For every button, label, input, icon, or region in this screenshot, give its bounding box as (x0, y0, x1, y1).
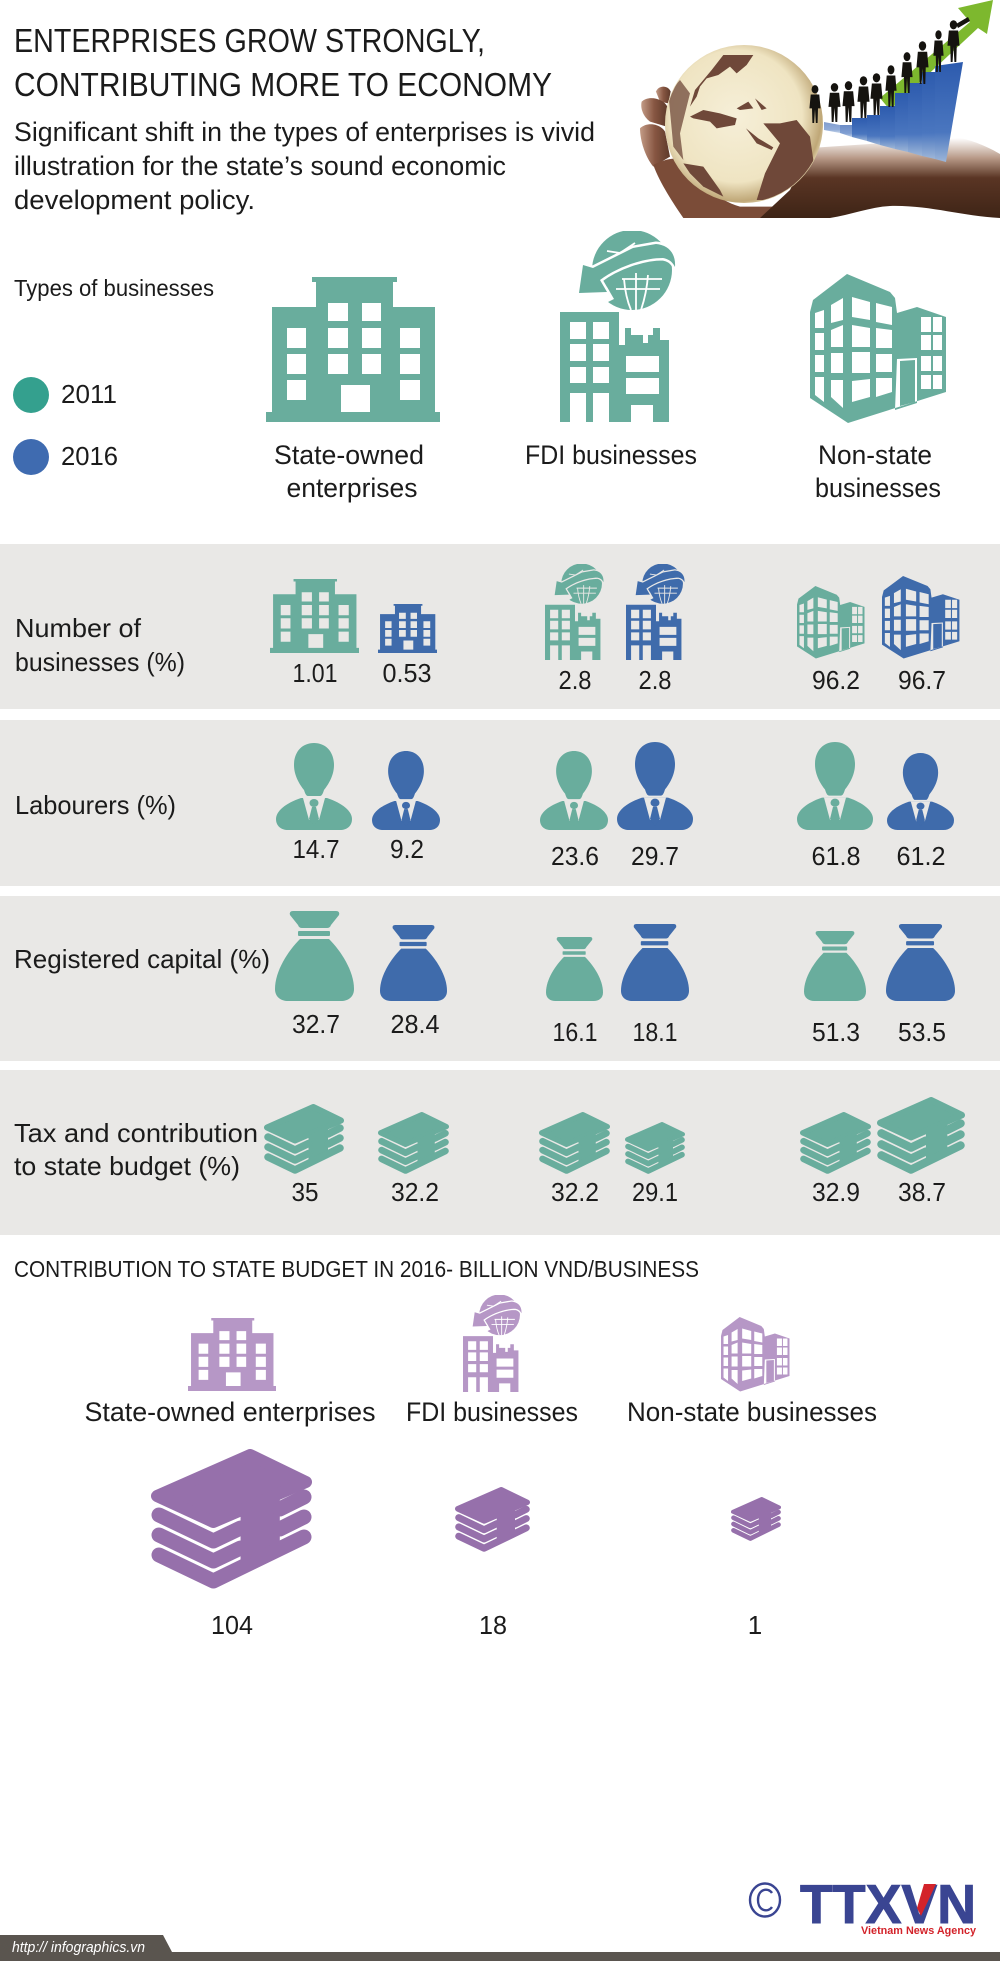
FDI 2016 (627, 1124, 683, 1207)
non-state 2011: 51.3 (812, 1017, 860, 1047)
non-state 2016: 96.7 (898, 665, 946, 695)
title: ENTERPRISES GROW STRONGLY, (14, 22, 485, 59)
agency name: Vietnam News Agency (861, 1925, 977, 1937)
row label: labourers: Labourers (%) (15, 790, 176, 820)
state-owned 2016: 0.53 (382, 658, 432, 688)
icon: green growth arrow (880, 0, 993, 110)
legend: 2016 (13, 439, 118, 475)
state-owned 2016 (378, 604, 437, 688)
non-state 2011 (797, 586, 865, 695)
FDI 2011 (546, 937, 603, 1047)
FDI 2011: 23.6 (551, 841, 599, 871)
state-owned 2011: 32.7 (292, 1009, 340, 1039)
type column: non-state businesses: businesses (815, 473, 941, 503)
FDI 2011: 2.8 (558, 665, 592, 695)
type column: state-owned enterprises: State-owned (274, 440, 424, 470)
FDI 2016: 2.8 (638, 665, 672, 695)
non-state 2016 (882, 576, 959, 695)
contribution column: non-state businesses (627, 1317, 877, 1640)
FDI 2016 (626, 563, 685, 695)
FDI 2016: 29.1 (632, 1177, 678, 1207)
state-owned 2016: 32.2 (391, 1177, 439, 1207)
state-owned 2011: 1.01 (292, 658, 338, 688)
state-owned 2011 (267, 1107, 341, 1207)
contribution column: non-state businesses: 1 (748, 1610, 762, 1640)
panel: registered capital (0, 896, 1000, 1061)
contribution column: FDI businesses (406, 1294, 578, 1640)
non-state 2016: 61.2 (896, 841, 946, 871)
icon: arm (760, 138, 1000, 218)
contribution column: FDI businesses: FDI businesses (406, 1397, 578, 1427)
state-owned 2011: 35 (292, 1177, 318, 1207)
type column: state-owned enterprises: enterprises (286, 473, 418, 503)
non-state 2011 (797, 742, 873, 871)
type column: FDI businesses: FDI businesses (525, 440, 697, 470)
FDI 2011 (542, 1115, 607, 1207)
state-owned 2016: 28.4 (390, 1009, 440, 1039)
icon: red V accent (917, 1884, 936, 1916)
subtitle text: development policy. (14, 185, 255, 215)
legend: 2011 (13, 377, 117, 413)
row label: number of businesses: businesses (%) (15, 647, 185, 677)
row label: number of businesses (15, 613, 185, 677)
non-state 2011: 96.2 (812, 665, 860, 695)
contribution column: state-owned enterprises: State-owned enterprises (84, 1397, 376, 1427)
non-state 2016 (887, 753, 954, 871)
FDI 2016 (617, 742, 693, 871)
non-state 2011 (804, 931, 866, 1047)
contribution column: non-state businesses: Non-state businesses (627, 1397, 877, 1427)
FDI 2011 (545, 563, 604, 695)
contribution column: state-owned enterprises: 104 (211, 1610, 253, 1640)
subtitle text (14, 117, 595, 215)
FDI 2011: 32.2 (551, 1177, 599, 1207)
contribution column: FDI businesses: 18 (479, 1610, 507, 1640)
legend: 2011: 2011 (61, 379, 117, 409)
icon: row of business people silhouettes (809, 17, 970, 123)
website address: http:// infographics.vn (12, 1939, 145, 1956)
title (14, 22, 552, 103)
state-owned 2016 (381, 1115, 446, 1207)
logo wordmark: TTXVN (800, 1873, 976, 1935)
panel: number of businesses (0, 544, 1000, 709)
contribution column: state-owned enterprises (84, 1318, 376, 1640)
state-owned 2016 (380, 925, 447, 1039)
icon: globe (665, 45, 823, 203)
icon: blue bar chart (824, 62, 963, 162)
row label: tax and contribution: to state budget (%) (14, 1151, 240, 1181)
state-owned 2011: 14.7 (292, 834, 340, 864)
non-state 2016 (886, 924, 955, 1047)
non-state 2016 (880, 1100, 962, 1207)
hero illustration: globe in hand with bars and people (640, 0, 1000, 218)
state-owned 2016 (372, 751, 440, 864)
panel: labourers (0, 720, 1000, 886)
FDI 2016 (621, 924, 689, 1047)
icon: copyright mark (750, 1884, 780, 1916)
state-owned 2011 (270, 579, 359, 688)
FDI 2011 (540, 751, 608, 871)
type column: non-state businesses: Non-state (818, 440, 932, 470)
row label: tax and contribution (14, 1118, 258, 1181)
non-state 2011: 32.9 (812, 1177, 860, 1207)
non-state 2016: 38.7 (898, 1177, 946, 1207)
type column: state-owned enterprises (266, 277, 440, 503)
FDI 2011: 16.1 (552, 1017, 598, 1047)
row label: number of businesses: Number of (15, 613, 142, 643)
type column: FDI businesses (525, 230, 697, 470)
row label: registered capital: Registered capital (%) (14, 944, 270, 974)
non-state 2011 (803, 1115, 868, 1207)
subtitle text: illustration for the state’s sound economic (14, 151, 506, 181)
logo: copyright and TTXVN Vietnam News Agency (750, 1873, 977, 1937)
state-owned 2011 (276, 743, 352, 864)
icon: continents (668, 55, 813, 200)
panel: tax and contribution to state budget (0, 1070, 1000, 1235)
FDI 2016: 29.7 (631, 841, 679, 871)
state-owned 2011 (275, 911, 354, 1039)
legend: 2016: 2016 (61, 441, 118, 471)
title: CONTRIBUTING MORE TO ECONOMY (14, 66, 552, 103)
non-state 2016: 53.5 (898, 1017, 946, 1047)
FDI 2016: 18.1 (632, 1017, 678, 1047)
row label: tax and contribution: Tax and contribution (14, 1118, 258, 1148)
footer bar with website tab (0, 1935, 1000, 1961)
subtitle text: Significant shift in the types of enterprises is vivid (14, 117, 595, 147)
legend title: types of businesses: Types of businesses (14, 275, 214, 301)
icon: hand and fingers (640, 87, 807, 218)
non-state 2011: 61.8 (812, 841, 860, 871)
section heading: contribution to state budget: CONTRIBUTION TO STATE BUDGET IN 2016- BILLION VND/BUSINESS (14, 1256, 699, 1282)
state-owned 2016: 9.2 (390, 834, 424, 864)
type column: non-state businesses (810, 274, 946, 503)
